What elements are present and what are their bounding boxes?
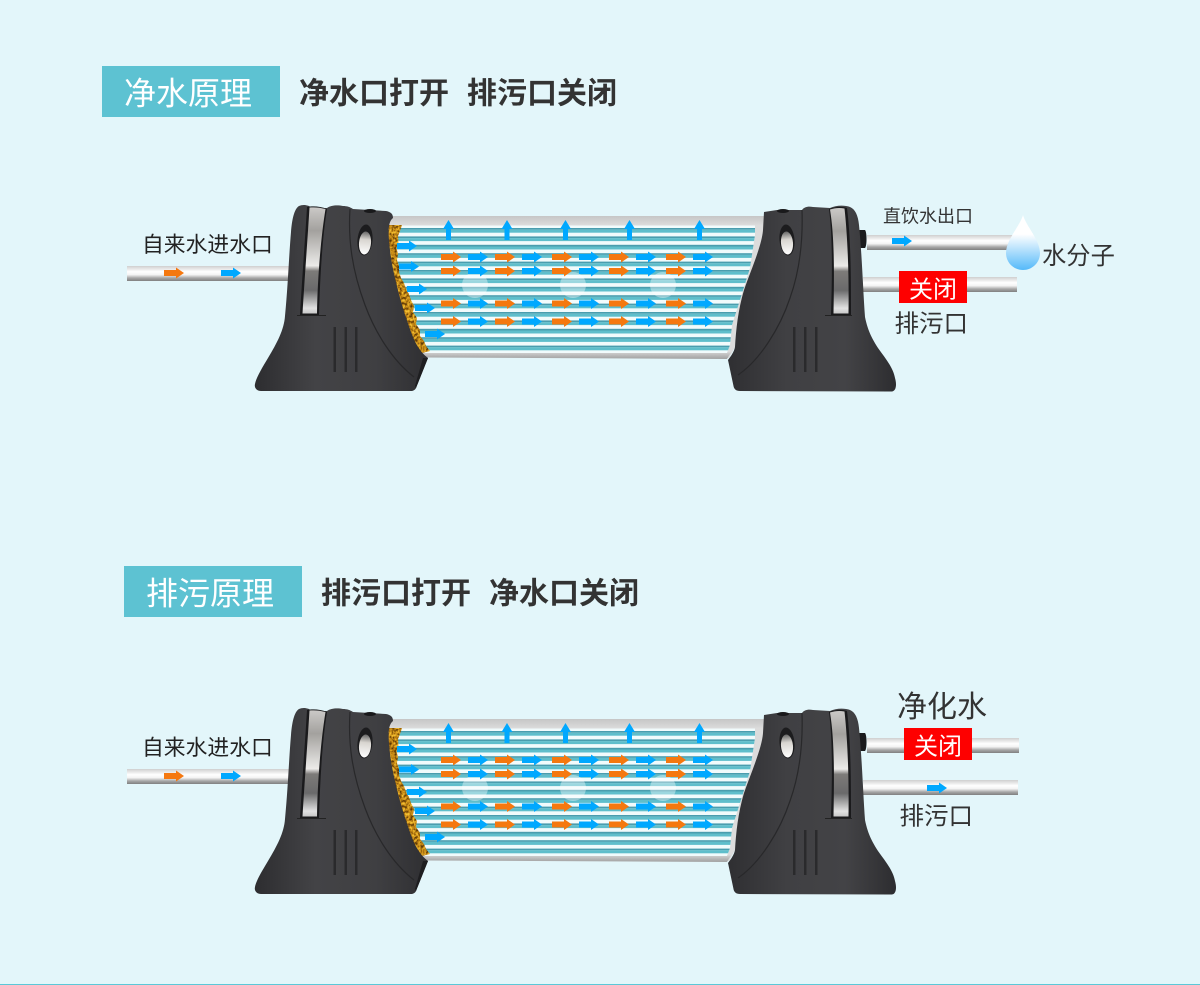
label: tap water inlet: 自来水进水口 <box>142 232 273 257</box>
left end cap <box>255 205 428 391</box>
icon: water drop <box>1006 215 1040 270</box>
direct drinking outlet pipe <box>867 235 1013 250</box>
drain pipe <box>863 277 1017 292</box>
closed tag <box>904 728 972 760</box>
row arrows <box>441 754 713 830</box>
panel: flush principle <box>124 566 1019 894</box>
left end cap <box>255 708 428 894</box>
label: drain outlet: 排污口 <box>894 310 968 338</box>
heading badge: 排污原理: 排污原理 <box>146 576 274 612</box>
filter tube with membranes and flow arrows <box>385 719 768 862</box>
closed tag <box>899 271 967 304</box>
closed tag: 关闭 <box>914 734 962 760</box>
bottom rule <box>0 984 1200 985</box>
drain pipe with flow arrow <box>863 780 1018 795</box>
label: water molecule: 水分子 <box>1042 243 1115 270</box>
subheading: clean outlet closed: 净水口关闭 <box>489 578 639 610</box>
right end cap <box>728 206 896 392</box>
subheading: drain open: 排污口打开 <box>321 578 471 610</box>
panel: water purification principle <box>102 66 1115 392</box>
inlet pipe with flow arrows <box>127 769 292 784</box>
heading badge: 净水原理: 净水原理 <box>124 76 252 112</box>
clean water outlet pipe <box>867 738 1019 753</box>
right end cap <box>728 709 896 894</box>
row arrows <box>441 252 713 327</box>
label: purified water: 净化水 <box>897 691 987 724</box>
inlet pipe with flow arrows <box>127 266 292 281</box>
heading badge: 排污原理 <box>124 566 302 617</box>
closed tag: 关闭 <box>909 276 957 304</box>
label: drain outlet: 排污口 <box>900 802 973 830</box>
label: tap water inlet: 自来水进水口 <box>142 735 273 760</box>
label: direct drinking outlet: 直饮水出口 <box>883 206 973 226</box>
subheading: clean outlet open: 净水口打开 <box>299 78 449 110</box>
filter tube with membranes and flow arrows <box>385 216 768 359</box>
heading badge: 净水原理 <box>102 66 280 117</box>
subheading: drain closed: 排污口关闭 <box>467 78 617 110</box>
